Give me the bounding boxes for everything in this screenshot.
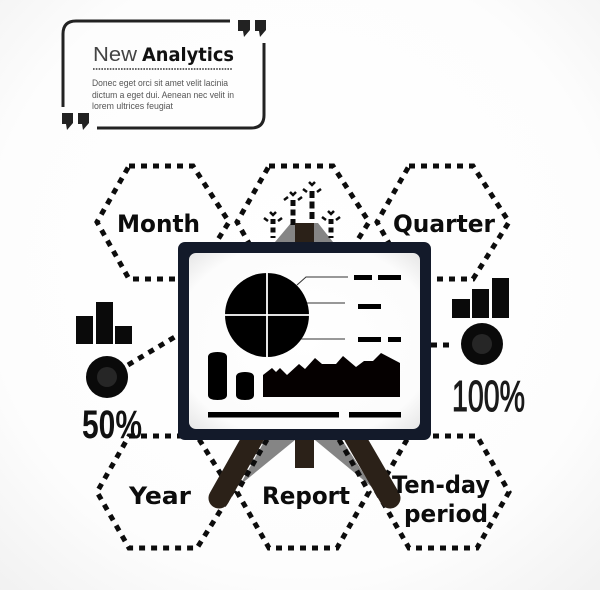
hexagon: Month xyxy=(97,166,229,279)
connector to board xyxy=(431,342,450,348)
label: Year: Year xyxy=(128,482,191,510)
stat: 50%: 50% xyxy=(82,403,142,447)
easel right leg xyxy=(354,436,390,498)
easel shadows xyxy=(240,223,373,488)
icon: bottom quote marks xyxy=(62,113,89,130)
panel: right 100% stat xyxy=(431,278,525,421)
callout body text: dictum a eget dui. Aenean nec velit in xyxy=(92,90,234,101)
labels xyxy=(117,210,495,528)
pie leader lines xyxy=(297,277,348,339)
area chart xyxy=(263,353,400,397)
board frame xyxy=(178,242,431,440)
label: Ten-day period: Ten-day xyxy=(392,471,490,499)
hexagon: Year xyxy=(97,436,232,548)
easel left leg xyxy=(219,436,254,498)
icon: target circle xyxy=(461,323,503,365)
arrow 1 xyxy=(264,212,282,238)
easel xyxy=(219,223,390,498)
label: Month: Month xyxy=(117,210,200,238)
label: Ten-day period: period xyxy=(404,500,488,528)
icon: target circle xyxy=(86,356,128,398)
callout frame xyxy=(63,21,264,128)
stat: 100%: 100% xyxy=(452,372,525,421)
hexagon: Quarter xyxy=(377,166,509,279)
callout heading: New xyxy=(93,44,138,66)
presentation board xyxy=(178,242,431,440)
arrow 3 xyxy=(303,182,321,221)
arrow 2 xyxy=(284,192,302,225)
cylinder chart xyxy=(208,352,254,400)
bar chart xyxy=(76,302,132,344)
dashed hexagons xyxy=(97,166,509,548)
hexagon: Ten-day period xyxy=(377,436,509,548)
bar chart xyxy=(452,278,509,318)
callout body text: Donec eget orci sit amet velit lacinia xyxy=(92,78,229,89)
label: Quarter: Quarter xyxy=(393,210,495,238)
easel centre post xyxy=(295,438,314,468)
label: Report: Report xyxy=(262,482,350,510)
easel top post xyxy=(295,223,314,243)
icon: top quote marks xyxy=(238,20,266,37)
pie chart xyxy=(224,272,310,358)
growth arrows above board xyxy=(264,182,340,238)
callout heading bold: Analytics xyxy=(142,44,234,66)
hexagon: Report xyxy=(237,436,369,548)
arrow 4 xyxy=(322,211,340,238)
callout: New Analytics quote box xyxy=(62,20,266,130)
legend dashes xyxy=(354,275,401,342)
hexagon: centre top xyxy=(237,166,369,279)
board screen xyxy=(189,253,420,429)
label: Ten-day period xyxy=(392,471,490,528)
callout body text: lorem ultrices feugiat xyxy=(92,101,173,112)
connector to board xyxy=(128,335,178,365)
bottom bars xyxy=(208,412,401,418)
panel: left 50% stat xyxy=(76,302,178,447)
